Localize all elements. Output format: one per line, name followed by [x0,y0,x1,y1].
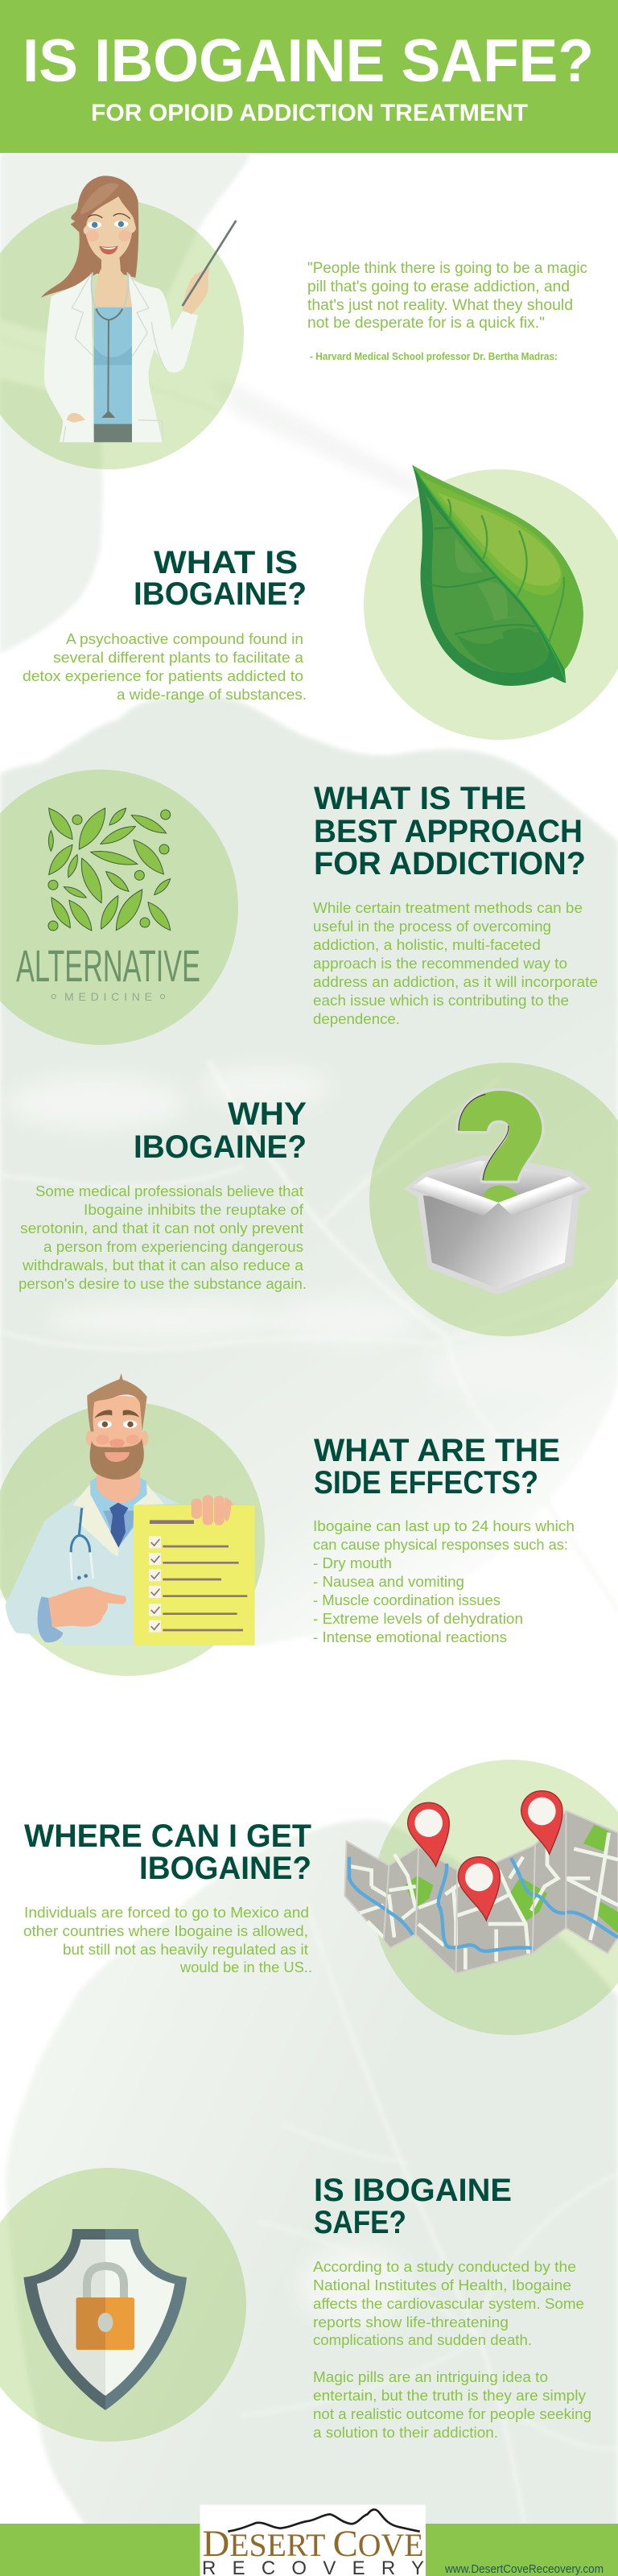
footer [0,2505,618,2576]
body text: would be in the US.. [179,1959,312,1975]
body text: According to a study conducted by the [313,2258,576,2275]
logo wordmark: ALTERNATIVE [16,940,200,991]
panel: doctor quote [0,175,587,469]
body text: withdrawals, but that it can also reduce a [22,1257,304,1274]
title: IS IBOGAINE SAFE? [23,27,594,94]
icon: male doctor with checklist [6,1373,255,1645]
circle backdrop [0,770,238,1045]
heading: IBOGAINE? [139,1851,311,1886]
heading [134,545,307,612]
body text [313,2258,591,2441]
icon: alternative medicine logo [48,808,171,999]
circle backdrop [0,2168,246,2442]
body text [23,1904,312,1975]
quote text: pill that's going to erase addiction, and [307,279,570,295]
body text: - Extreme levels of dehydration [313,1610,523,1627]
body text: Ibogaine inhibits the reuptake of [84,1201,304,1218]
heading: WHERE CAN I GET [24,1818,311,1854]
circle backdrop [364,469,618,740]
icon: question mark in open box [404,1091,592,1294]
body text: detox experience for patients addicted to [23,667,303,684]
icon: green leaf [412,465,583,686]
logo wordmark: MEDICINE [64,990,152,1003]
circle backdrop [0,199,244,469]
body text: A psychoactive compound found in [66,630,303,647]
heading: WHY [228,1096,307,1132]
body text: useful in the process of overcoming [313,918,551,935]
heading [314,1433,560,1501]
body text: several different plants to facilitate a [53,649,304,666]
body text: reports show life-threatening [313,2314,509,2330]
body text: Individuals are forced to go to Mexico and [24,1904,309,1921]
icon: folded map with pins [344,1791,618,1974]
body text: a solution to their addiction. [313,2424,498,2441]
logo wordmark [16,940,200,1003]
icon: female doctor with pointer [41,175,236,442]
heading: FOR ADDICTION? [314,846,586,881]
body text [19,1183,307,1292]
heading [314,781,586,881]
body text: other countries where Ibogaine is allowed, [23,1922,308,1939]
body text: affects the cardiovascular system. Some [313,2295,584,2312]
body text: but still not as heavily regulated as it [63,1941,308,1958]
body text: address an addiction, as it will incorporate [313,973,598,990]
body text: not a realistic outcome for people seeking [313,2405,591,2422]
logo: Desert Cove Recovery: DESERT COVE [203,2523,423,2565]
body text: serotonin, and that it can not only prevent [20,1220,303,1236]
body text: Ibogaine can last up to 24 hours which [313,1517,575,1534]
body text: - Nausea and vomiting [313,1573,464,1590]
heading: WHAT ARE THE [314,1433,560,1468]
heading: SIDE EFFECTS? [314,1465,538,1501]
body text [313,899,598,1027]
panel: where to get ibogaine [23,1760,618,2035]
heading [24,1818,311,1886]
panel: what is ibogaine [23,465,618,740]
body text: entertain, but the truth is they are simply [313,2387,587,2404]
panel: side effects [0,1373,575,1676]
logo: Desert Cove Recovery [200,2505,426,2576]
circle backdrop [0,1402,265,1676]
body text: complications and sudden death. [313,2331,532,2348]
website url: www.DesertCoveReceovery.com [444,2563,604,2576]
panel: why ibogaine [19,1063,618,1336]
body text [313,1517,575,1645]
body text: - Muscle coordination issues [313,1591,501,1608]
body text [23,630,307,703]
body text: addiction, a holistic, multi-faceted [313,936,541,953]
heading: WHAT IS [154,545,298,580]
heading: IBOGAINE? [134,576,307,612]
body text: each issue which is contributing to the [313,992,569,1009]
icon: shield with padlock [24,2229,187,2410]
body text: approach is the recommended way to [313,955,567,972]
body text: Some medical professionals believe that [35,1183,303,1199]
body text: Magic pills are an intriguing idea to [313,2368,548,2385]
quote text: that's just not reality. What they should [307,297,573,314]
heading [314,2173,512,2240]
body text: While certain treatment methods can be [313,899,583,916]
heading: IBOGAINE? [134,1129,307,1165]
quote text: not be desperate for is a quick fix." [307,315,545,332]
quote text: "People think there is going to be a magic [307,260,587,277]
body text: can cause physical responses such as: [313,1536,568,1553]
circle backdrop [373,1760,618,2035]
header banner [0,0,618,153]
heading [134,1096,307,1165]
heading: BEST APPROACH [314,814,583,849]
body text: person's desire to use the substance again. [19,1275,307,1292]
body text: a wide-range of substances. [117,686,307,703]
heading: IS IBOGAINE [314,2173,512,2208]
quote text [307,260,587,332]
heading: SAFE? [314,2205,406,2240]
quote attribution: - Harvard Medical School professor Dr. Bertha Madras: [310,351,558,362]
circle backdrop [369,1063,618,1336]
body text: National Institutes of Health, Ibogaine [313,2277,571,2293]
heading: WHAT IS THE [314,781,526,816]
panel: is ibogaine safe [0,2168,591,2442]
body text: - Intense emotional reactions [313,1629,507,1645]
panel: best approach [0,770,598,1045]
body text: dependence. [313,1010,400,1027]
body text: a person from experiencing dangerous [43,1238,303,1255]
subtitle: FOR OPIOID ADDICTION TREATMENT [91,100,528,126]
body text: - Dry mouth [313,1554,392,1571]
